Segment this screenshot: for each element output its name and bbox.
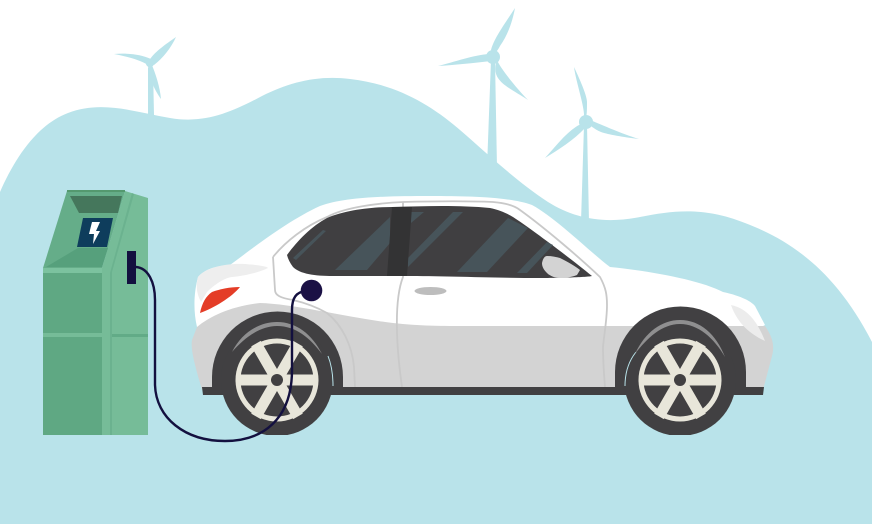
rear wheel [221, 322, 333, 436]
side mirror [542, 256, 580, 278]
charging station [43, 190, 148, 435]
roof outline [273, 201, 607, 387]
door divider [397, 202, 403, 387]
car lower body [192, 303, 773, 390]
station slanted top [43, 191, 125, 268]
rear door outline [273, 257, 355, 387]
car [192, 196, 773, 436]
front wheel arch [615, 306, 746, 388]
spoiler [197, 264, 268, 302]
station screen [77, 218, 113, 247]
wind turbine: right [545, 67, 639, 222]
station front panel [43, 268, 102, 435]
window pillar [387, 207, 412, 276]
charging cable [136, 267, 306, 441]
wind turbine: centre [438, 8, 528, 168]
wind turbine: left [114, 37, 176, 115]
tail light [200, 287, 240, 313]
window reflections [293, 212, 553, 273]
window glass [287, 206, 592, 278]
front wheel [624, 320, 736, 436]
car body [194, 196, 765, 340]
station recess [70, 196, 122, 213]
sill [202, 387, 764, 395]
icon: lightning bolt [89, 222, 100, 244]
rear wheel arch [212, 312, 343, 388]
door handle [414, 287, 446, 295]
charging connector [127, 251, 136, 284]
headlight [731, 305, 765, 341]
station side panel [102, 191, 148, 435]
charging plug [301, 280, 322, 301]
